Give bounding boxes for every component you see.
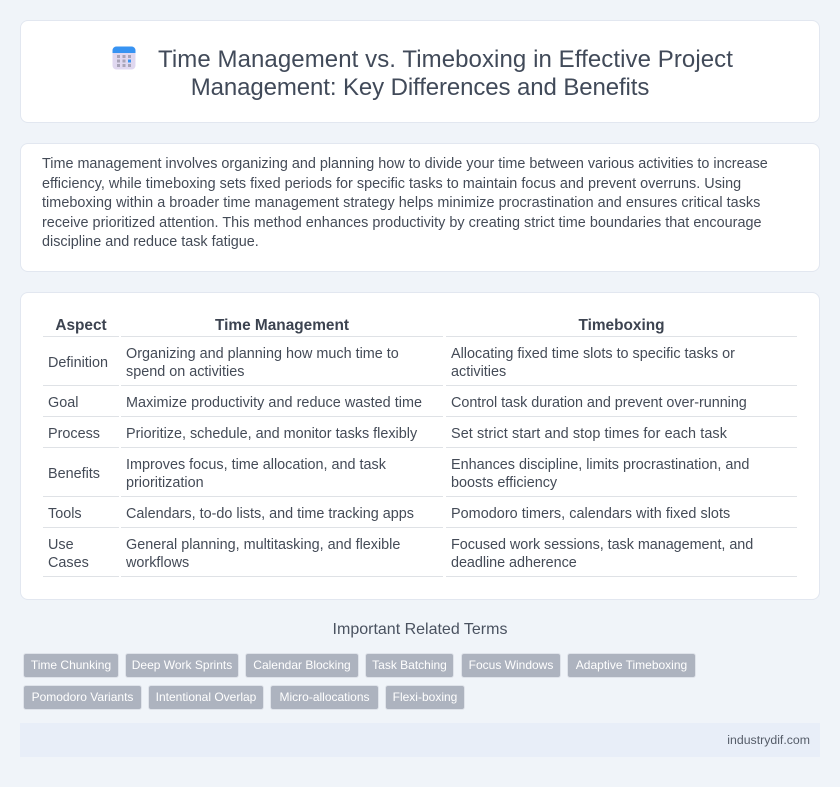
tag — [461, 653, 561, 678]
comparison table: Enhances discipline, limits procrastination, and — [451, 457, 749, 473]
comparison table: Set strict start and stop times for each task — [451, 426, 727, 442]
intro text: receive prioritized attention. This method enhances productivity by creating strict time boundaries that encourage — [42, 215, 762, 231]
tag: Calendar Blocking — [253, 658, 351, 672]
comparison table: Pomodoro timers, calendars with fixed slots — [451, 506, 730, 522]
row: tools: Tools — [48, 506, 82, 522]
comparison table: Prioritize, schedule, and monitor tasks flexibly — [126, 426, 417, 442]
related term tags — [23, 653, 696, 710]
footer — [20, 723, 820, 757]
icon: calendar — [112, 46, 136, 70]
tag — [148, 685, 264, 710]
comparison table: Focused work sessions, task management, and — [451, 537, 753, 553]
tag — [385, 685, 465, 710]
comparison table: boosts efficiency — [451, 475, 557, 491]
intro text: Time management involves organizing and planning how to divide your time between various activities to increase — [42, 156, 768, 172]
row: use cases — [48, 537, 89, 571]
tag — [365, 653, 454, 678]
intro text: efficiency, while timeboxing sets fixed periods for specific tasks to maintain focus and prevent overruns. Using — [42, 176, 741, 192]
tag: Focus Windows — [469, 658, 553, 672]
tag — [23, 685, 142, 710]
comparison table — [43, 317, 797, 577]
comparison table: workflows — [126, 555, 189, 571]
row: use cases: Cases — [48, 555, 89, 571]
comparison table: Maximize productivity and reduce wasted time — [126, 395, 422, 411]
tag: Time Chunking — [31, 658, 111, 672]
comparison table: deadline adherence — [451, 555, 577, 571]
row: definition: Definition — [48, 355, 108, 371]
tag: Flexi-boxing — [393, 690, 457, 704]
title: Time Management vs. Timeboxing in Effective Project — [158, 46, 733, 73]
tag — [270, 685, 379, 710]
comparison table: General planning, multitasking, and flexible — [126, 537, 400, 553]
tag: Micro-allocations — [279, 690, 370, 704]
tag — [245, 653, 359, 678]
comparison table: Organizing and planning how much time to — [126, 346, 399, 362]
tag: Adaptive Timeboxing — [576, 658, 687, 672]
intro text: timeboxing within a broader time management strategy helps minimize procrastination and ensures critical tasks — [42, 195, 760, 211]
tag: Task Batching — [372, 658, 447, 672]
comparison table: Calendars, to-do lists, and time tracking apps — [126, 506, 414, 522]
row: use cases: Use — [48, 537, 74, 553]
tag — [23, 653, 119, 678]
table panel — [20, 292, 820, 600]
header card — [20, 20, 820, 123]
comparison table: Control task duration and prevent over-running — [451, 395, 747, 411]
tag: Intentional Overlap — [156, 690, 256, 704]
comparison table: activities — [451, 364, 506, 380]
related terms heading: Important Related Terms — [333, 621, 507, 638]
comparison table: spend on activities — [126, 364, 244, 380]
comparison table: Timeboxing — [578, 317, 665, 334]
comparison table: Improves focus, time allocation, and task — [126, 457, 386, 473]
row: benefits: Benefits — [48, 466, 100, 482]
footer source: industrydif.com — [727, 733, 810, 747]
title — [158, 46, 733, 101]
comparison table: Time Management — [215, 317, 349, 334]
intro text: discipline and reduce task fatigue. — [42, 234, 259, 250]
table header: Aspect — [55, 317, 107, 334]
row: process: Process — [48, 426, 100, 442]
tag — [567, 653, 696, 678]
tag: Deep Work Sprints — [132, 658, 232, 672]
title: Management: Key Differences and Benefits — [191, 74, 649, 101]
row: goal: Goal — [48, 395, 78, 411]
tag: Pomodoro Variants — [32, 690, 133, 704]
intro panel — [20, 143, 820, 272]
comparison table: Allocating fixed time slots to specific tasks or — [451, 346, 735, 362]
comparison table: prioritization — [126, 475, 204, 491]
intro text — [42, 156, 768, 250]
tag — [125, 653, 239, 678]
